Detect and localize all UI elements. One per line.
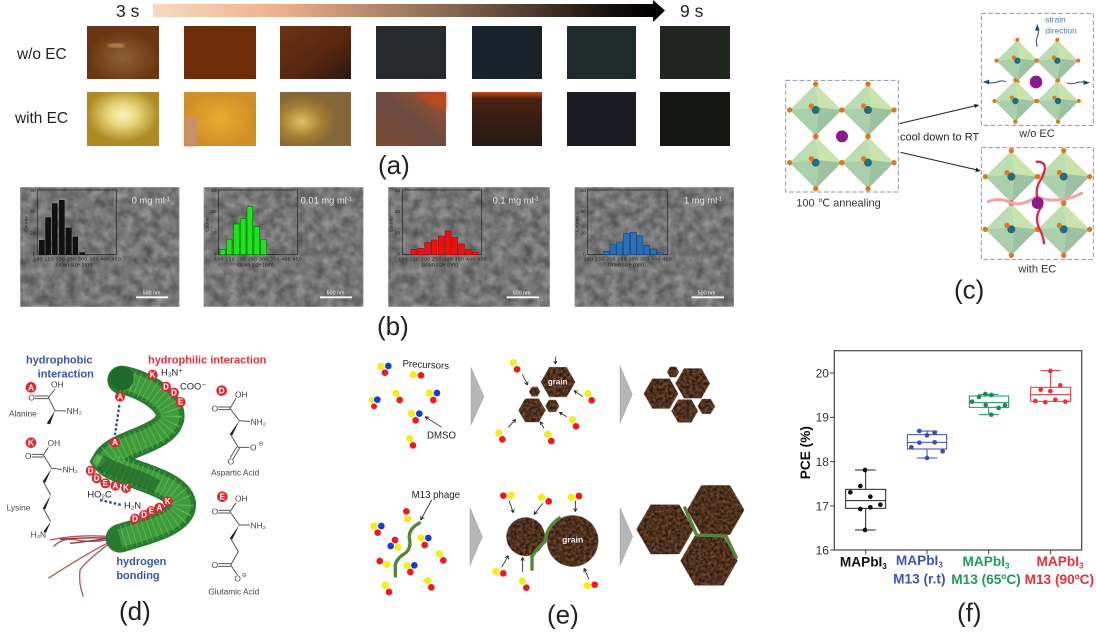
chemical group labels: COO⁻ [180,381,206,391]
structure: alanine: NH₂ [67,406,82,416]
structure: alanine: A [28,382,34,392]
SEM tile 1 mg/ml: 100 150 200 250 300 350 400 450 [584,256,672,262]
residue markers on helix: D [141,511,147,520]
arrow to w/o EC [899,104,979,124]
structure: glutamic acid: O [212,560,219,570]
SEM tile 0.1 mg/ml: 0.1 mg ml [493,195,534,205]
residue markers on helix: E [178,398,184,407]
SEM tile 0 mg/ml: 0 mg ml [132,195,165,205]
residue markers on helix: D [171,388,177,397]
plot frame and axes: 17 [816,499,829,513]
photo row: with EC [87,92,730,146]
SEM tile 0 mg/ml: 20 [30,231,36,237]
structure: glutamic acid: E [220,492,226,502]
SEM tile 1 mg/ml: 1 mg ml [684,195,717,205]
residue markers on helix: K [123,484,129,493]
green helix [100,366,182,538]
structure: glutamic acid [208,491,266,596]
SEM tile 0 mg/ml: 60 [30,188,36,194]
grains [506,367,744,585]
structure: aspartic acid: O [212,403,219,413]
SEM tile 0.1 mg/ml: Grain size (nm) [422,263,458,269]
SEM tile 0.01 mg/ml [204,187,363,307]
SEM tile 1 mg/ml: 40 [580,209,586,215]
panel d: M13 phage helix and amino acids [7,354,267,626]
residue markers on helix: K [150,370,156,379]
lattice: with EC [981,148,1093,259]
SEM tile 0.1 mg/ml: Counts [389,216,395,232]
SEM tile 0.1 mg/ml: -1 [534,196,539,202]
box: M13 room temperature [907,429,947,460]
plot frame and axes [798,351,1082,557]
small arrows [421,357,589,579]
structure: aspartic acid: Aspartic Acid [211,468,260,478]
x label M13 r.t: M13 (r.t) [893,571,946,586]
residue markers on helix: A [156,503,162,512]
structure: glutamic acid: Glutamic Acid [208,586,260,596]
residue markers on helix: D [94,474,100,483]
plot frame and axes: 19 [816,411,829,425]
x label M13 90C: MAPbI [1037,554,1084,570]
SEM tile 1 mg/ml: 0 [583,251,586,257]
residue markers on helix: A [112,481,118,490]
strain direction label: direction [1045,25,1077,35]
SEM tile 0.1 mg/ml [388,187,550,307]
SEM tile 0 mg/ml: 500 nm [143,290,161,296]
residue markers on helix: E [103,479,109,488]
label with EC: with EC [1017,263,1056,275]
SEM tile 0 mg/ml: Counts [23,216,29,232]
chemical group labels: H₂N [124,501,141,511]
structure: alanine [9,380,82,424]
SEM tile 0 mg/ml: -1 [165,196,170,202]
row label w/o EC: w/o EC [16,46,67,63]
label 100 C annealing: 100 ℃ annealing [796,198,881,210]
plot frame and axes: 20 [816,366,829,380]
lattice: 100 C annealing [786,80,898,192]
x label M13 65C: 3 [1005,561,1010,570]
structure: lysine: NH₂ [63,465,78,475]
SEM tile 0.01 mg/ml: 100 150 200 250 300 350 400 450 [214,256,302,262]
SEM tile 0.01 mg/ml: 0 [214,251,217,257]
panel e: grain growth schematic [368,357,744,629]
precursor dots red [371,366,598,595]
SEM tile 1 mg/ml: Grain size (nm) [608,263,644,269]
x label M13 65C: M13 (65ºC) [951,572,1021,587]
structure: lysine: O [25,451,32,461]
DMSO dots blue [374,363,440,569]
structure: aspartic acid: NH₂ [251,417,266,427]
label M13 phage: M13 phage [412,490,460,501]
heading hydrophobic interaction: interaction [38,369,94,381]
structure: aspartic acid: O [250,443,257,453]
residue markers on helix: A [117,392,123,401]
chemical group labels [87,367,206,511]
label w/o EC: w/o EC [1018,128,1055,140]
x label MAPbI3: 3 [882,562,887,571]
panel b: SEM images with grain size histograms [20,187,734,341]
residue markers on helix: K [165,497,171,506]
heading hydrogen bonding: hydrogen [116,556,167,568]
SEM tile 0.01 mg/ml: Counts [204,216,210,232]
photo row: w/o EC [87,26,730,79]
SEM tile 0.01 mg/ml: Grain size (nm) [237,263,274,269]
process triangles [470,366,633,566]
SEM tile 0.01 mg/ml: 20 [211,231,217,237]
lattice: w/o EC [981,13,1093,125]
chemical group labels: H₃N⁺ [161,367,183,377]
x label M13 r.t: 3 [938,560,943,569]
panel label (d): (d) [119,596,151,626]
heading hydrophilic interaction: hydrophilic interaction [148,354,267,366]
residue markers on helix: A [112,438,118,447]
label cool down to RT: cool down to RT [900,132,979,144]
heading hydrophobic interaction: hydrophobic [26,354,93,366]
SEM tile 0.01 mg/ml: -1 [347,196,352,202]
SEM tile 1 mg/ml: 60 [580,188,586,194]
structure: lysine: H₃N [31,529,46,539]
label 9 s: 9 s [680,1,704,21]
structure: lysine: Lysine [7,503,31,513]
structure: alanine: Alanine [9,409,37,419]
residue markers on helix [86,370,186,524]
elastomer ribbons [988,162,1082,243]
strain direction label: strain [1045,14,1066,24]
box: M13 90C [1031,369,1071,405]
structure: aspartic acid: ⊖ [258,441,264,447]
x label MAPbI3: MAPbI [840,555,882,570]
x label M13 90C: M13 (90ºC) [1025,572,1094,587]
plot frame and axes: 18 [816,455,829,469]
arrow to with EC [901,152,981,172]
plot frame and axes: 16 [816,543,829,557]
heading hydrogen bonding: bonding [116,570,160,582]
SEM tile 1 mg/ml [574,187,734,307]
label Precursors: Precursors [402,359,450,372]
structure: glutamic acid: NH₂ [251,520,266,530]
SEM tile 0.1 mg/ml: 60 [395,188,400,194]
row label with EC: with EC [14,110,68,127]
structure: aspartic acid: OH [235,389,247,399]
x label M13 65C: MAPbI [963,554,1010,570]
SEM tile 0.1 mg/ml: 100 150 200 250 300 350 400 450 [398,256,487,262]
residue markers on helix: D [132,514,138,523]
SEM tile 0.1 mg/ml: 20 [395,231,400,237]
SEM tile 0 mg/ml: 40 [30,209,36,215]
SEM tile 0 mg/ml [20,187,179,307]
structure: lysine [7,437,78,539]
plot frame and axes: PCE (%) [798,426,813,479]
panel f: PCE box plot [798,351,1094,628]
SEM tile 1 mg/ml: Counts [574,216,580,232]
box: M13 65C [969,392,1009,417]
SEM tile 0.01 mg/ml: 500 nm [327,290,345,296]
structure: alanine: O [28,393,35,403]
x label M13 r.t: MAPbI [896,553,943,569]
structure: aspartic acid: D [219,386,225,396]
SEM tile 1 mg/ml: 20 [580,231,586,237]
panel c: perovskite lattice schematic [786,13,1093,304]
panel a: film colour change over time [14,0,730,180]
SEM tile 0 mg/ml: Grain size (nm) [56,263,93,269]
SEM tile 0.01 mg/ml: 0.01 mg ml [301,195,347,205]
residue markers on helix: D [163,382,169,391]
SEM tile 0 mg/ml: 100 150 200 250 300 350 400 450 [33,256,121,262]
residue markers on helix: E [149,507,155,516]
strain arrows [984,25,1089,84]
label grain bottom: grain [562,535,583,545]
panel label (f): (f) [957,598,982,628]
interaction dashed lines [100,405,122,505]
SEM tile 1 mg/ml: 500 nm [698,290,716,296]
label 3 s: 3 s [116,1,140,21]
structure: glutamic acid: O [234,574,241,584]
label DMSO: DMSO [427,430,456,441]
SEM tile 0.1 mg/ml: 40 [395,209,400,215]
panel label (a): (a) [378,150,410,180]
structure: glutamic acid: ⊖ [242,573,247,579]
time gradient arrow [153,0,665,22]
structure: glutamic acid: O [212,507,219,517]
structure: alanine: OH [51,380,63,390]
structure: lysine: K [28,438,34,448]
M13 phage strands [395,507,737,577]
residue markers on helix: D [88,466,94,475]
x label M13 90C: 3 [1079,561,1084,570]
chemical group labels: HO₂C [87,490,112,500]
phage tail fibres [48,536,117,597]
panel label (e): (e) [547,599,579,629]
structure: lysine: OH [48,438,60,448]
SEM tile 1 mg/ml: -1 [717,196,722,202]
SEM tile 0.01 mg/ml: 40 [211,209,217,215]
structure: glutamic acid: OH [235,494,247,504]
SEM tile 0.1 mg/ml: 0 [397,251,400,257]
structure: aspartic acid [211,385,266,478]
precursor dots yellow [368,359,592,589]
structure: aspartic acid: O [228,456,235,466]
panel label (c): (c) [954,274,984,304]
SEM tile 0 mg/ml: 0 [33,251,36,257]
SEM tile 0.01 mg/ml: 60 [211,188,217,194]
panel label (b): (b) [377,311,409,341]
label grain top: grain [548,377,568,386]
SEM tile 0.1 mg/ml: 500 nm [513,290,531,296]
box: MAPbI3 [846,468,886,532]
